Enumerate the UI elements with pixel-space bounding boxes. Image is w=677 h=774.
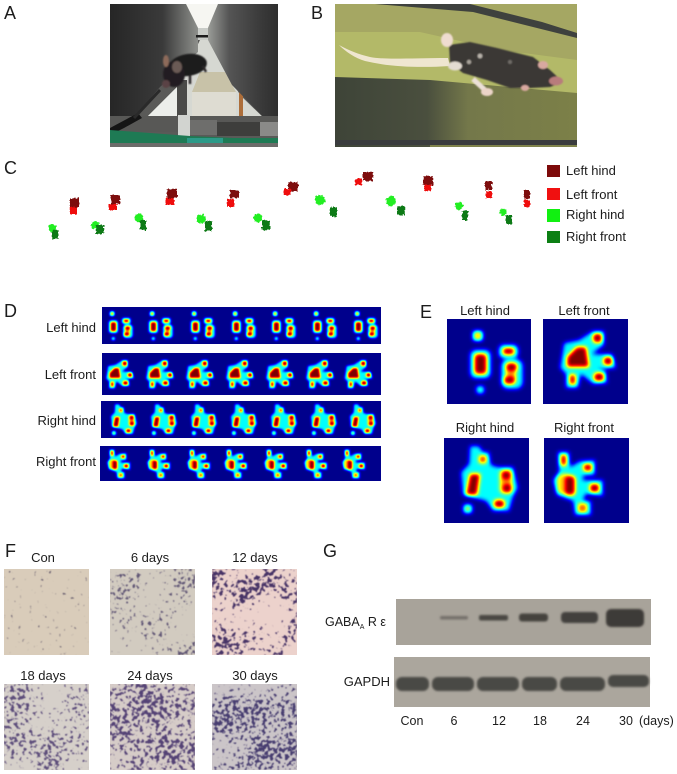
strip: right front: Right front (36, 454, 96, 469)
panel G: western blot (323, 541, 674, 728)
label B: B (311, 3, 323, 23)
legend: Left front (566, 187, 618, 202)
section: 24 days (110, 668, 195, 770)
panel E: enlarged paw heat maps (420, 302, 629, 523)
strip: right front (36, 446, 381, 481)
blot: GAPDH: GAPDH (344, 674, 390, 689)
blot: GABA-A receptor epsilon: GABA (325, 615, 360, 629)
strip: left front: Left front (45, 367, 96, 382)
heat map: right front (544, 420, 629, 523)
section: Con (4, 550, 89, 655)
section: 24 days: 24 days (127, 668, 173, 683)
label G: G (323, 541, 337, 561)
icon: rat body (441, 33, 563, 96)
section: 6 days: 6 days (131, 550, 170, 565)
label F: F (5, 541, 16, 561)
section: 18 days (4, 668, 89, 770)
blot: GABA-A receptor epsilon: A (360, 624, 365, 631)
legend: Right hind (566, 207, 625, 222)
right footprints (48, 195, 512, 239)
lane labels: (days) (639, 714, 674, 728)
section: Con: Con (31, 550, 55, 565)
blot: GABA-A receptor epsilon: R ε (364, 615, 386, 629)
heat map: right hind: Right hind (456, 420, 514, 435)
legend: Left hind (566, 163, 616, 178)
panel C: footprints (4, 158, 626, 244)
icon: mouse (162, 51, 208, 88)
label E: E (420, 302, 432, 322)
lane labels: 18 (533, 714, 547, 728)
legend (547, 163, 626, 244)
strip: right hind (37, 401, 381, 438)
panel D: paw pressure strips (4, 301, 381, 481)
heat map: left front: Left front (558, 303, 610, 318)
section: 12 days (212, 550, 297, 655)
lane labels (401, 714, 674, 728)
lane labels: 30 (619, 714, 633, 728)
section: 30 days: 30 days (232, 668, 278, 683)
lane labels: 24 (576, 714, 590, 728)
section: 18 days: 18 days (20, 668, 66, 683)
heat map: left hind (447, 303, 531, 404)
section: 30 days (212, 668, 297, 770)
heat map: left hind: Left hind (460, 303, 510, 318)
blot: GAPDH (344, 657, 650, 707)
strip: left hind: Left hind (46, 320, 96, 335)
panel B: rat on runway photo (311, 3, 577, 147)
legend: Right front (566, 229, 626, 244)
lane labels: 6 (451, 714, 458, 728)
label D: D (4, 301, 17, 321)
icon: rat tail (339, 45, 450, 67)
section: 12 days: 12 days (232, 550, 278, 565)
strip: right hind: Right hind (37, 413, 96, 428)
strip: left hind (46, 307, 381, 344)
heat map: left front (543, 303, 628, 404)
strip: left front (45, 353, 381, 395)
label C: C (4, 158, 17, 178)
section: 6 days (110, 550, 195, 655)
lane labels: Con (401, 714, 424, 728)
panel F: histology sections (4, 541, 297, 770)
lane labels: 12 (492, 714, 506, 728)
panel A: mouse on walkway photo (4, 3, 278, 147)
label A: A (4, 3, 16, 23)
left footprints (70, 172, 530, 214)
blot: GABA-A receptor epsilon (325, 599, 651, 645)
heat map: right hind (444, 420, 529, 523)
heat map: right front: Right front (554, 420, 614, 435)
